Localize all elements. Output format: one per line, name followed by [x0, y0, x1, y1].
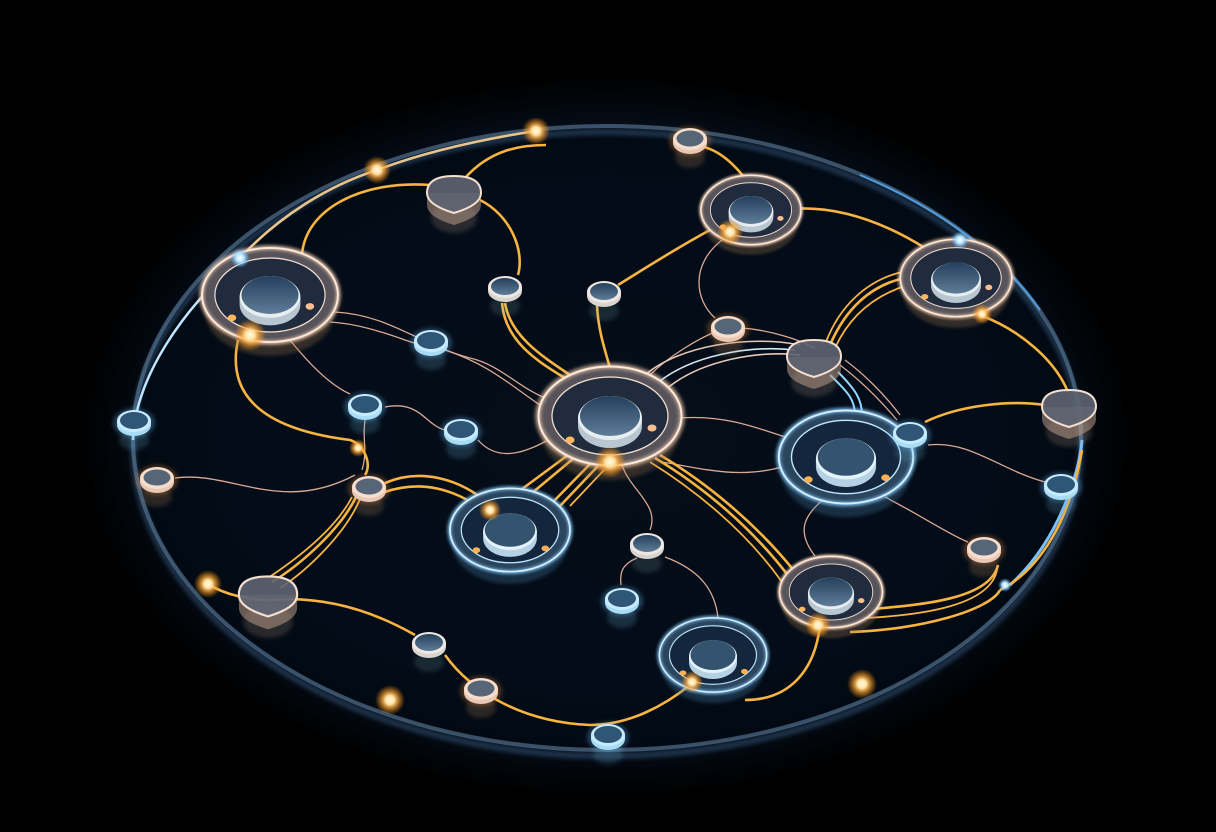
- hub: bottom: [659, 618, 767, 703]
- hub: top centre: [701, 175, 801, 255]
- hub: lower right: [779, 556, 883, 638]
- hub: centre: [538, 366, 682, 480]
- translucent junction nodes: [239, 176, 1096, 638]
- panel: glass disc: [133, 126, 1082, 756]
- thin pink connections: [175, 240, 1045, 618]
- hub: top left: [202, 248, 338, 356]
- orange connections: [208, 131, 1082, 725]
- glow points: [194, 117, 1012, 715]
- small nodes: [113, 126, 1082, 764]
- blue connection bundle: [645, 341, 862, 415]
- hub: top right: [900, 239, 1012, 328]
- hub: lower left blue: [450, 488, 570, 584]
- disc halo: [82, 77, 1132, 797]
- hub: right blue: [778, 410, 914, 517]
